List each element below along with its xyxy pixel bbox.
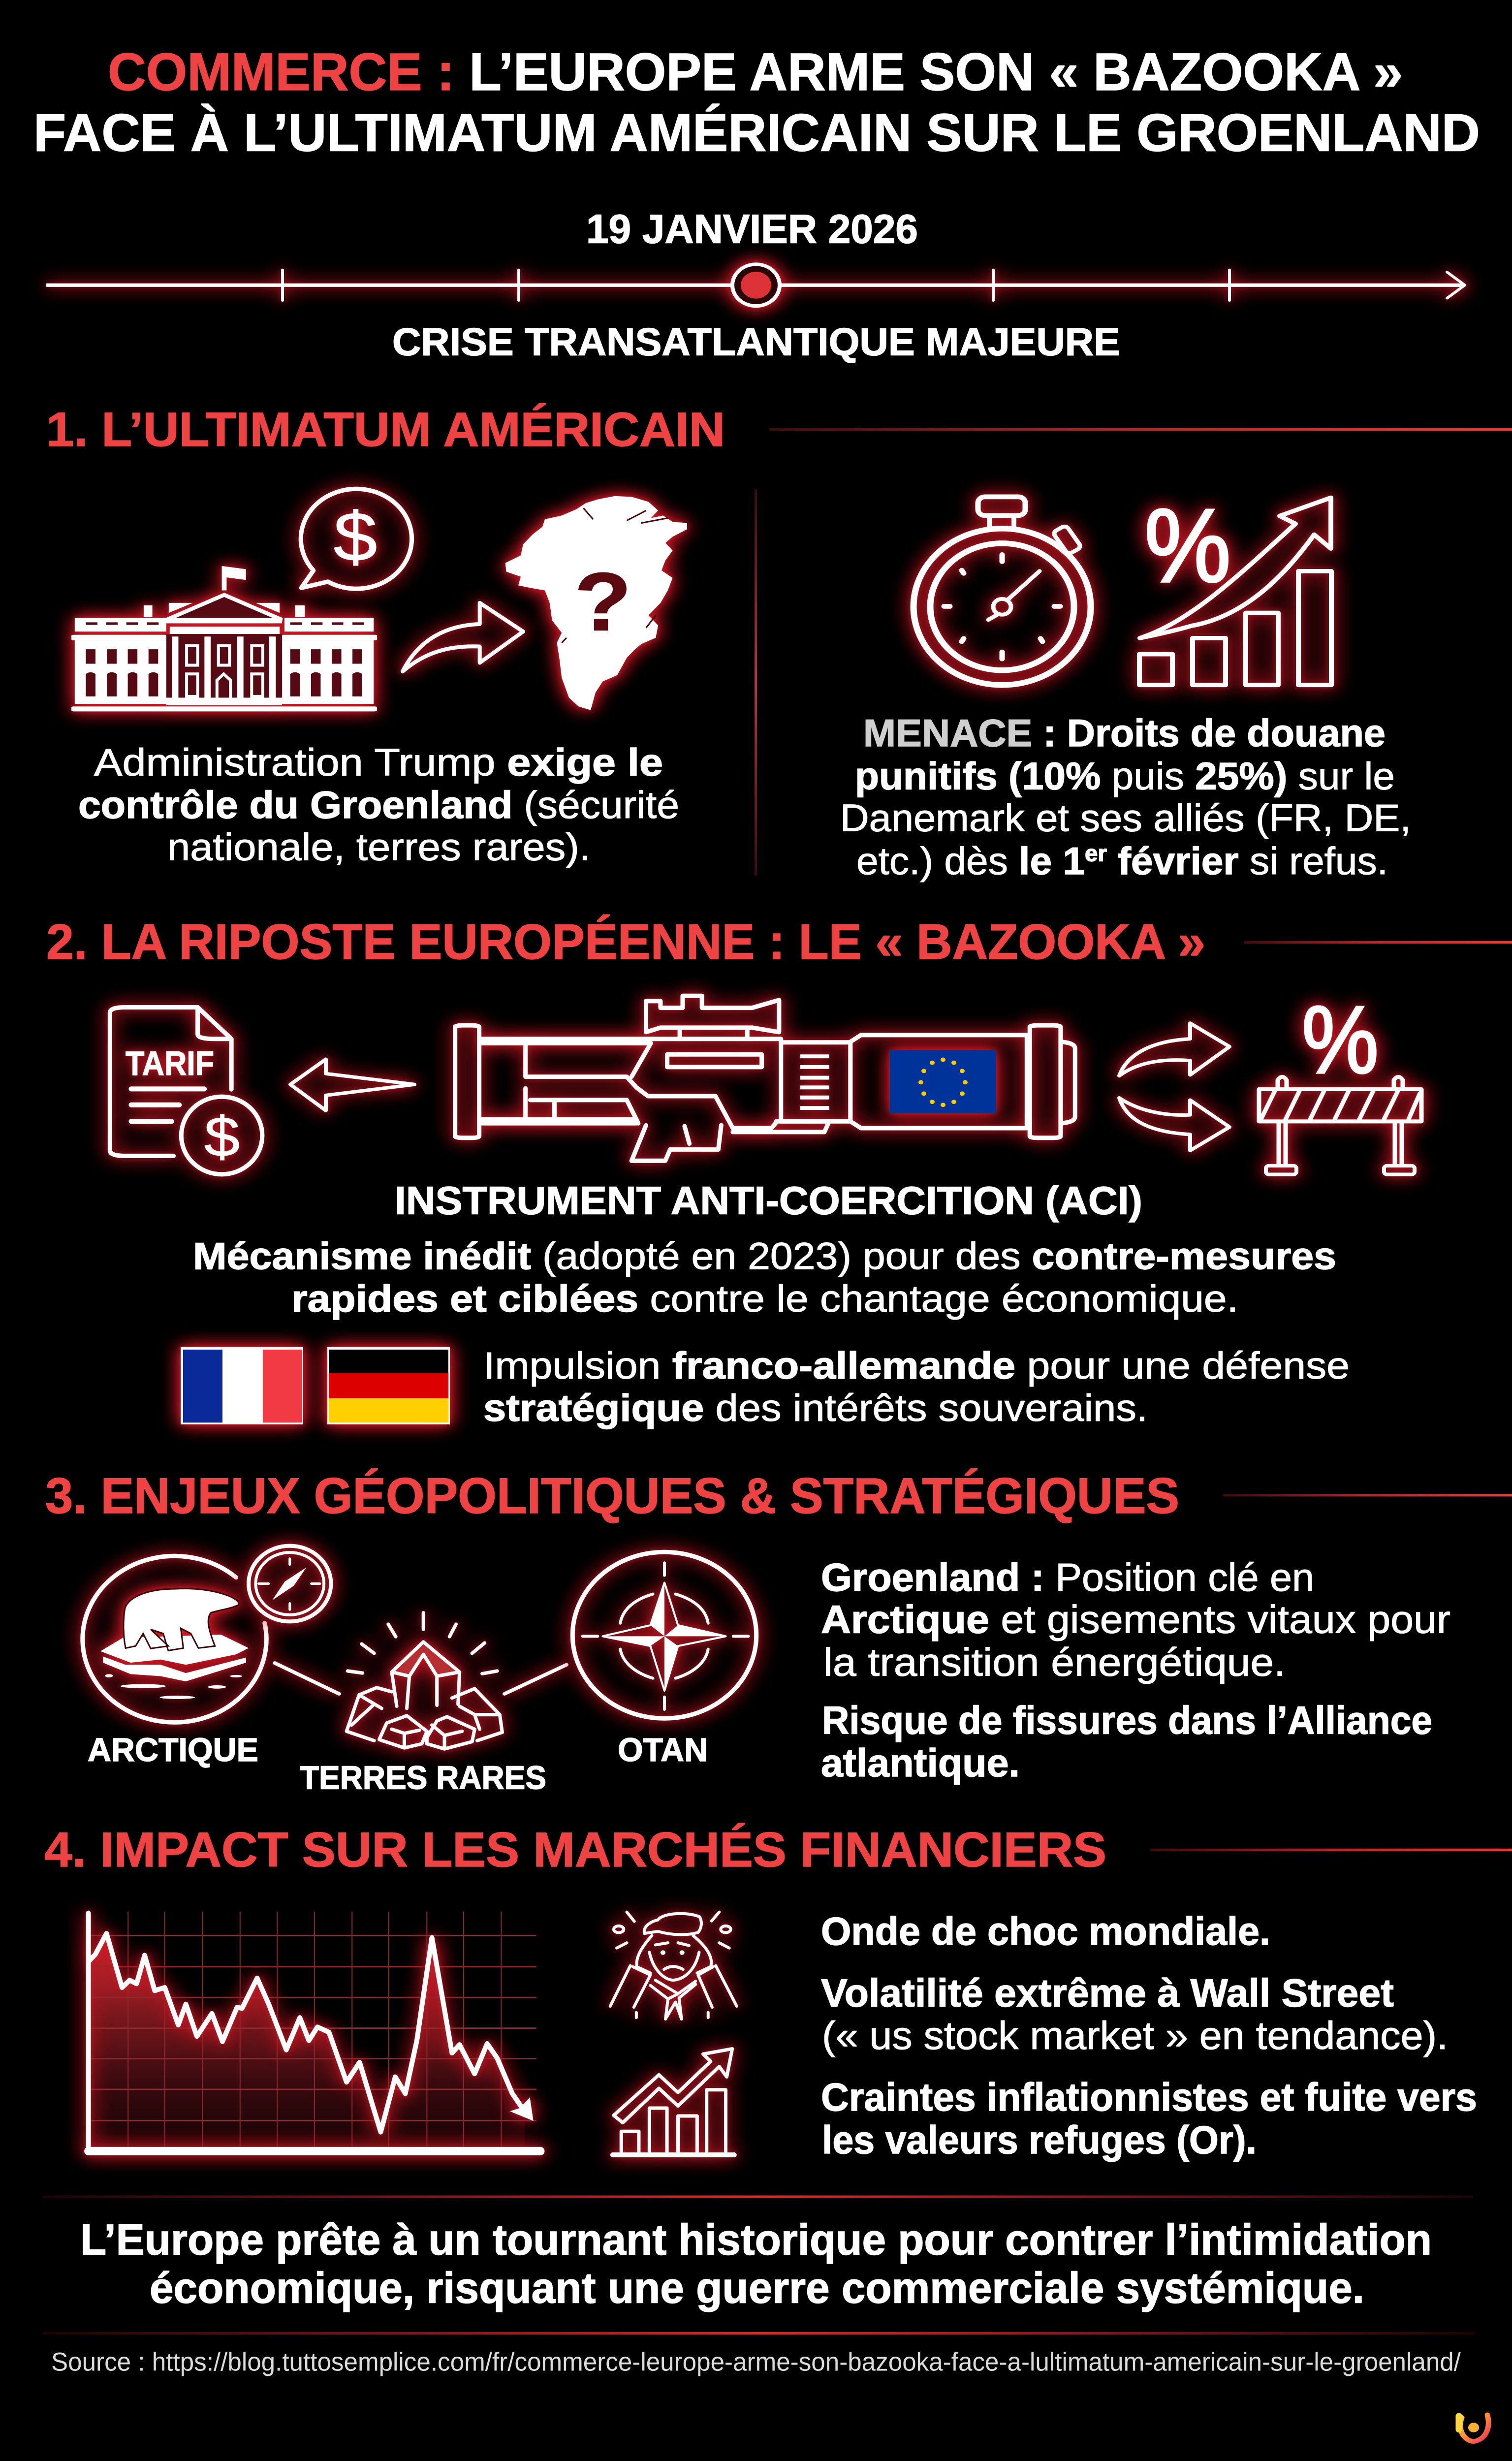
text: threat: MENACE : Droits de douane xyxy=(863,712,1386,755)
conclusion: économique, risquant une guerre commerciale systémique. xyxy=(150,2264,1364,2312)
text: threat: punitifs (10% puis 25%) sur le xyxy=(855,755,1395,798)
text: greenland position: la transition énergétique. xyxy=(823,1640,1286,1684)
icon: worried trader xyxy=(610,1912,737,2019)
heading 1 xyxy=(46,403,1512,456)
text: mechanism xyxy=(193,1235,1336,1320)
icon: french flag xyxy=(181,1347,303,1424)
label: instrument: INSTRUMENT ANTI-COERCITION (ACI) xyxy=(395,1178,1142,1222)
text: franco-german impulse xyxy=(483,1345,1350,1429)
title xyxy=(33,42,1480,162)
icon: greenland map: ? xyxy=(574,556,631,648)
icon: european flag xyxy=(890,1050,996,1113)
text: alliance risk xyxy=(821,1699,1432,1785)
icon: stopwatch xyxy=(914,497,1091,685)
label: arctic: ARCTIQUE xyxy=(88,1732,258,1768)
text: mechanism: Mécanisme inédit (adopté en 2023) pour des contre-mesures xyxy=(193,1235,1336,1277)
icon: compass xyxy=(249,1546,331,1621)
text: greenland position: Groenland : Position clé en xyxy=(821,1555,1314,1599)
text: market impacts xyxy=(821,1909,1477,2162)
heading 3: 3. ENJEUX GÉOPOLITIQUES & STRATÉGIQUES xyxy=(45,1468,1179,1524)
heading 1: 1. L’ULTIMATUM AMÉRICAIN xyxy=(46,403,725,456)
text: market impacts: Volatilité extrême à Wall Street xyxy=(821,1971,1394,2015)
text: greenland position: Arctique et gisements vitaux pour xyxy=(821,1598,1450,1641)
text: franco-german impulse: stratégique des intérêts souverains. xyxy=(483,1387,1148,1429)
title: COMMERCE : L’EUROPE ARME SON « BAZOOKA » xyxy=(108,42,1403,101)
icon: speech bubble with dollar: $ xyxy=(334,498,377,575)
icon: arrow to greenland xyxy=(403,603,523,671)
icon: tariff document: TARIF xyxy=(126,1044,214,1082)
panel: financial markets xyxy=(89,1909,1477,2162)
text: american demand: nationale, terres rares). xyxy=(167,825,591,868)
text: threat: etc.) dès le 1 xyxy=(856,840,1091,883)
conclusion xyxy=(80,2215,1432,2312)
heading 2: 2. LA RIPOSTE EUROPÉENNE : LE « BAZOOKA » xyxy=(46,914,1205,970)
text: american demand: contrôle du Groenland (sécurité xyxy=(78,784,679,826)
text: american demand: Administration Trump exige le xyxy=(94,741,663,784)
icon: rising tariff chart: % xyxy=(1144,487,1231,603)
icon: percent barrier xyxy=(1259,986,1421,1174)
panel: geopolitical stakes xyxy=(83,1546,1450,1797)
divider xyxy=(755,489,757,876)
label: nato: OTAN xyxy=(618,1732,708,1768)
chart: market crash line xyxy=(89,1912,540,2151)
text: threat: er xyxy=(1085,841,1107,866)
heading 4: 4. IMPACT SUR LES MARCHÉS FINANCIERS xyxy=(44,1822,1106,1877)
text: mechanism: rapides et ciblées contre le chantage économique. xyxy=(291,1278,1238,1320)
icon: nato star xyxy=(572,1552,756,1718)
icon: arctic polar bear xyxy=(83,1556,266,1722)
text: market impacts: les valeurs refuges (Or). xyxy=(822,2118,1257,2162)
text: franco-german impulse: Impulsion franco-allemande pour une défense xyxy=(483,1345,1350,1387)
panel: american demand xyxy=(71,489,687,868)
text: threat xyxy=(840,712,1411,883)
icon: rare earth crystals xyxy=(346,1613,502,1749)
label: rare earths: TERRES RARES xyxy=(300,1760,546,1797)
icon: bazooka xyxy=(455,996,1075,1161)
icon: german flag xyxy=(327,1347,450,1424)
panel: threat xyxy=(840,487,1411,883)
text: market impacts: (« us stock market » en tendance). xyxy=(822,2014,1448,2057)
icon: speech bubble with dollar xyxy=(301,489,412,589)
logo xyxy=(1459,2415,1488,2441)
divider xyxy=(43,2332,1475,2335)
icon: rising tariff chart xyxy=(1139,487,1331,685)
timeline xyxy=(46,264,1465,306)
panel: bazooka response xyxy=(110,986,1421,1429)
icon: tariff document: $ xyxy=(204,1105,240,1168)
date label: 19 JANVIER 2026 xyxy=(586,207,918,252)
icon: white house xyxy=(71,566,377,711)
text: american demand xyxy=(78,741,679,868)
text: threat: février xyxy=(1107,840,1239,883)
text: greenland position xyxy=(821,1555,1450,1684)
icon: greenland map xyxy=(505,496,687,710)
arrows: toward barrier xyxy=(1119,1023,1229,1151)
connector lines xyxy=(275,1663,567,1694)
text: alliance risk: atlantique. xyxy=(821,1741,1020,1785)
text: market impacts: Onde de choc mondiale. xyxy=(821,1909,1270,1953)
icon: percent barrier: % xyxy=(1302,986,1379,1093)
timeline caption: CRISE TRANSATLANTIQUE MAJEURE xyxy=(392,320,1120,363)
divider xyxy=(43,2195,1473,2198)
text: threat: si refus. xyxy=(1251,840,1402,883)
arrow: toward tariff xyxy=(290,1059,414,1110)
text: threat: Danemark et ses alliés (FR, DE, xyxy=(840,796,1411,839)
icon: tariff document xyxy=(110,1007,262,1174)
icon: inflation chart xyxy=(613,2049,734,2155)
